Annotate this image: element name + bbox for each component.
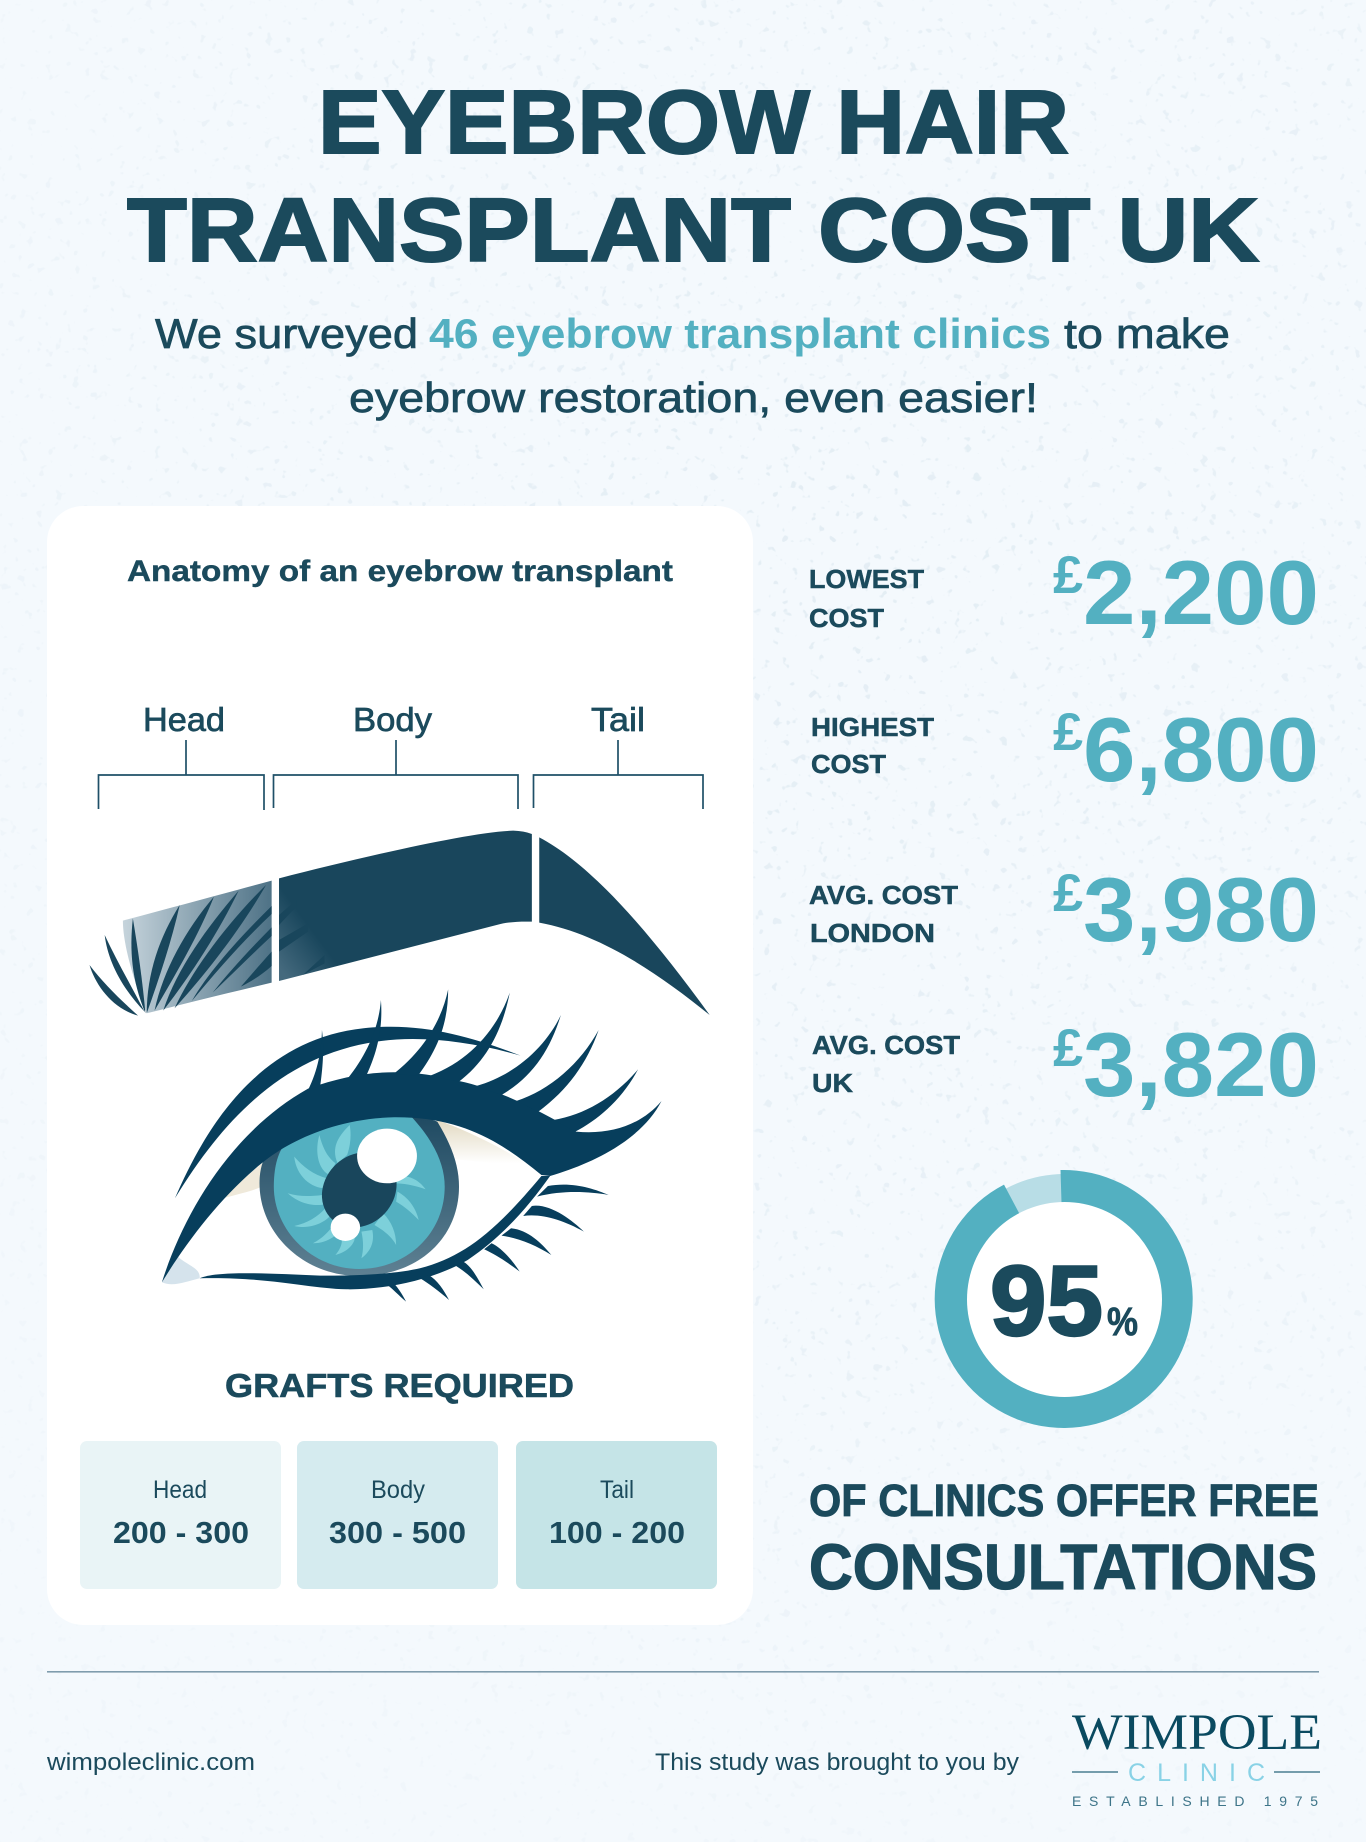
stat: average cost UK: UK bbox=[812, 1068, 853, 1098]
logo: Wimpole Clinic: WIMPOLE bbox=[1072, 1705, 1322, 1761]
label: head bracket bbox=[98, 701, 264, 810]
callout: free consultations bbox=[809, 1475, 1319, 1603]
stat: highest cost: COST bbox=[811, 749, 886, 779]
grafts box: body: 300 - 500 bbox=[329, 1515, 466, 1550]
stat: highest cost: HIGHEST bbox=[811, 712, 934, 742]
grafts box: head: 200 - 300 bbox=[113, 1515, 249, 1550]
lower lid and lashes bbox=[200, 1176, 609, 1302]
title: TRANSPLANT COST UK bbox=[127, 181, 1259, 281]
subtitle: to make bbox=[1064, 310, 1230, 357]
stat: average cost London: £ bbox=[1053, 864, 1083, 923]
donut chart: 95%: 95 bbox=[990, 1245, 1103, 1356]
lid shadow bbox=[223, 1120, 531, 1198]
stat: lowest cost: £ bbox=[1053, 546, 1083, 605]
callout: free consultations: OF CLINICS OFFER FREE bbox=[809, 1475, 1319, 1526]
grafts box: body: Body bbox=[371, 1476, 425, 1504]
tear duct bbox=[162, 1253, 200, 1284]
stat: lowest cost bbox=[809, 543, 1319, 644]
label: body bracket: Body bbox=[353, 701, 433, 738]
logo: Wimpole Clinic: ESTABLISHED 1975 bbox=[1072, 1793, 1318, 1809]
stat: highest cost: 6,800 bbox=[1083, 700, 1319, 801]
stat: highest cost bbox=[811, 700, 1319, 801]
panel: anatomy card bbox=[47, 506, 753, 1625]
label: head bracket: Head bbox=[143, 701, 225, 738]
stat: average cost London: 3,980 bbox=[1083, 860, 1319, 961]
footer: credit: This study was brought to you by bbox=[655, 1749, 1019, 1776]
eyebrow body segment bbox=[279, 831, 532, 981]
eyebrow tail segment bbox=[539, 837, 710, 1015]
grafts box: head: Head bbox=[153, 1476, 207, 1504]
callout: free consultations: CONSULTATIONS bbox=[809, 1531, 1317, 1603]
stat: average cost UK bbox=[812, 1015, 1319, 1116]
grafts box: tail: Tail bbox=[600, 1476, 634, 1504]
stat: lowest cost: COST bbox=[809, 603, 884, 633]
stat: average cost London bbox=[809, 860, 1319, 961]
label: tail bracket bbox=[534, 701, 703, 809]
label: body bracket bbox=[274, 701, 518, 809]
grafts box: tail bbox=[516, 1441, 717, 1589]
stat: average cost London: LONDON bbox=[810, 918, 935, 948]
label: tail bracket: Tail bbox=[591, 701, 645, 738]
stat: lowest cost: LOWEST bbox=[809, 564, 924, 594]
stat: lowest cost: 2,200 bbox=[1083, 543, 1319, 644]
upper lid and lashes bbox=[162, 989, 662, 1282]
iris bbox=[260, 1110, 459, 1276]
footer: website: wimpoleclinic.com bbox=[46, 1749, 255, 1776]
grafts box: head bbox=[80, 1441, 281, 1589]
subtitle bbox=[155, 310, 1230, 421]
title: EYEBROW HAIR bbox=[318, 73, 1069, 173]
subtitle: 46 eyebrow transplant clinics bbox=[429, 310, 1051, 357]
title bbox=[127, 73, 1259, 281]
icon: eyebrow bbox=[89, 831, 710, 1016]
stat: average cost UK: AVG. COST bbox=[812, 1030, 960, 1060]
subtitle: eyebrow restoration, even easier! bbox=[349, 374, 1038, 421]
grafts box: tail: 100 - 200 bbox=[549, 1515, 685, 1550]
subtitle: We surveyed bbox=[155, 310, 418, 357]
donut chart: 95%: % bbox=[1107, 1300, 1138, 1344]
grafts box: body bbox=[297, 1441, 498, 1589]
donut chart: 95% bbox=[935, 1170, 1193, 1428]
card heading: Anatomy of an eyebrow transplant bbox=[127, 555, 673, 588]
icon: eye bbox=[162, 989, 662, 1302]
grafts heading: GRAFTS REQUIRED bbox=[225, 1367, 574, 1404]
stat: average cost London: AVG. COST bbox=[809, 880, 958, 910]
stat: average cost UK: £ bbox=[1053, 1019, 1083, 1078]
logo: Wimpole Clinic: CLINIC bbox=[1128, 1759, 1265, 1787]
logo: Wimpole Clinic bbox=[1072, 1705, 1322, 1809]
stat: highest cost: £ bbox=[1053, 703, 1083, 762]
stat: average cost UK: 3,820 bbox=[1083, 1015, 1319, 1116]
eyebrow head segment bbox=[89, 881, 272, 1016]
